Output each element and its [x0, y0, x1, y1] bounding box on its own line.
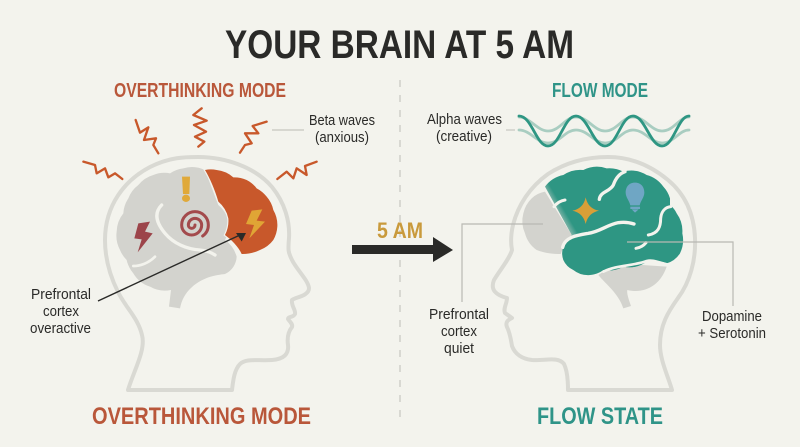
- callout: alpha waves: [427, 111, 515, 145]
- brain orange prefrontal lobe: [205, 169, 277, 254]
- arrow: 5 AM transition: [352, 218, 453, 262]
- brain teal: [545, 167, 683, 275]
- icon: lightbulb: [626, 183, 644, 213]
- brain left (zoom coordinates): [83, 108, 317, 308]
- callout: prefrontal cortex overactive: cortex: [43, 303, 79, 320]
- brain gray: [116, 167, 237, 308]
- brain fold lines: [554, 172, 671, 272]
- callout: prefrontal cortex overactive: Prefrontal: [31, 286, 91, 303]
- callout: dopamine + serotonin: Dopamine: [702, 308, 762, 325]
- lower temporal lobe teal: [562, 227, 647, 275]
- callout: alpha waves: Alpha waves: [427, 111, 502, 128]
- heading: flow mode: FLOW MODE: [552, 80, 648, 102]
- callout: prefrontal cortex quiet: [429, 224, 543, 357]
- callout: beta waves: (anxious): [315, 129, 369, 146]
- heading: bottom overthinking mode: OVERTHINKING MODE: [92, 403, 311, 430]
- icon: bolt yellow: [246, 209, 265, 238]
- heading: flow state: FLOW STATE: [537, 403, 663, 430]
- callout: prefrontal cortex quiet: quiet: [444, 340, 475, 357]
- brain right (zoom coordinates): [522, 167, 683, 308]
- alpha waves: [519, 116, 689, 146]
- beta wave marks: [83, 108, 317, 179]
- callout: dopamine + serotonin: [627, 242, 766, 342]
- icon: exclamation: [182, 177, 190, 202]
- icon: bolt maroon: [134, 222, 153, 252]
- heading: overthinking mode: OVERTHINKING MODE: [114, 80, 286, 102]
- head outline left: [105, 157, 309, 390]
- panel: overthinking head: [83, 108, 317, 390]
- callout: beta waves: Beta waves: [309, 112, 375, 129]
- icon: star: [572, 197, 599, 224]
- callout: beta waves: [272, 112, 375, 146]
- callout: prefrontal cortex quiet: Prefrontal: [429, 306, 489, 323]
- callout: alpha waves: (creative): [436, 128, 492, 145]
- panel: flow head: [493, 157, 695, 390]
- callout: prefrontal cortex overactive: [30, 233, 246, 337]
- callout: prefrontal cortex quiet: cortex: [441, 323, 477, 340]
- title: YOUR BRAIN AT 5 AM: [225, 23, 574, 67]
- brain quiet gray prefrontal: [522, 192, 572, 254]
- arrow: 5 AM transition: 5 AM: [377, 218, 423, 243]
- brain fold lines: [157, 205, 215, 255]
- icon: spiral: [182, 212, 208, 236]
- head outline right: [493, 157, 695, 390]
- cerebellum and stem: [598, 263, 667, 308]
- callout: dopamine + serotonin: + Serotonin: [698, 325, 766, 342]
- callout: prefrontal cortex overactive: overactive: [30, 320, 91, 337]
